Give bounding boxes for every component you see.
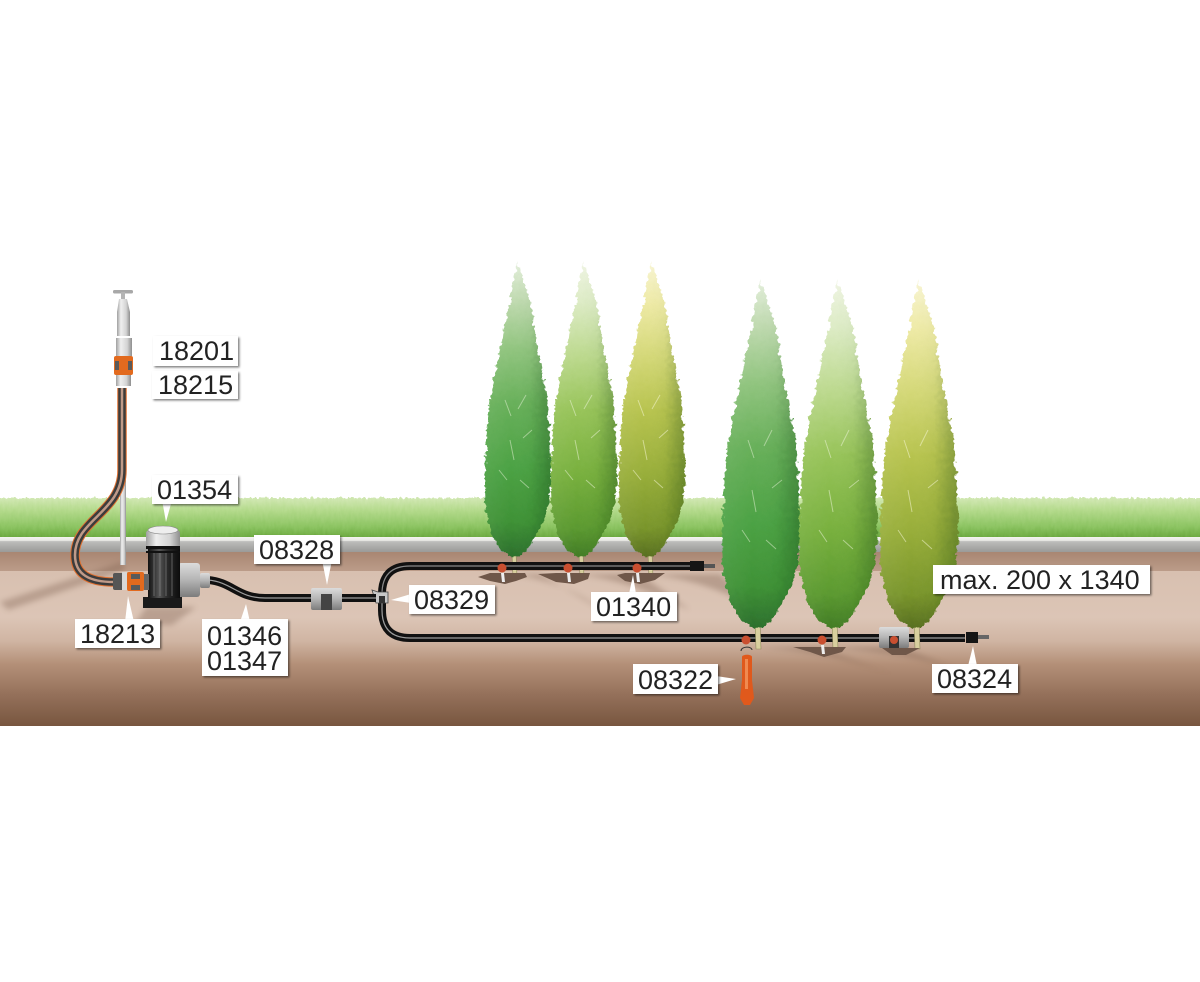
ground patches with drippers, upper row bbox=[478, 564, 665, 584]
main pipe bbox=[208, 580, 376, 598]
tree 4 bbox=[722, 280, 800, 649]
metal rod bbox=[120, 470, 126, 565]
soil bbox=[0, 552, 1200, 726]
tree 1 bbox=[485, 262, 551, 577]
label 01340 bbox=[591, 575, 677, 622]
tap and connectors bbox=[113, 290, 133, 386]
label 08322: 08322 bbox=[638, 665, 713, 695]
label 18215: 18215 bbox=[158, 370, 233, 400]
garden hose bbox=[75, 388, 122, 582]
row 1 trees bbox=[485, 262, 685, 577]
tree 5 bbox=[799, 280, 877, 649]
label 01354: 01354 bbox=[157, 475, 232, 505]
label 08324: 08324 bbox=[937, 664, 1012, 694]
orange hose connector 18213 bbox=[113, 572, 149, 591]
label 01340: 01340 bbox=[596, 592, 671, 622]
ground patches with drippers, lower row bbox=[742, 636, 920, 657]
tree 6 bbox=[880, 280, 958, 649]
orange tool 08322 bbox=[740, 647, 754, 705]
end plug, lower pipe bbox=[966, 632, 989, 643]
label 08329: 08329 bbox=[414, 585, 489, 615]
label 08324 bbox=[932, 646, 1018, 694]
T connector 08329 bbox=[372, 590, 388, 603]
label 18201: 18201 bbox=[159, 336, 234, 366]
filter unit 01354 bbox=[143, 526, 210, 608]
label 01346 / 01347: 01347 bbox=[207, 646, 282, 676]
row 2 trees bbox=[722, 280, 958, 649]
label max. 200 x 1340: max. 200 x 1340 bbox=[940, 565, 1140, 595]
tree 3 bbox=[619, 262, 685, 577]
tree 2 bbox=[551, 262, 617, 577]
end plug, upper pipe bbox=[690, 561, 715, 571]
label 08328 bbox=[254, 535, 340, 585]
grass strip bbox=[0, 498, 1200, 539]
label 01346 / 01347: 01346 bbox=[207, 621, 282, 651]
kerb bbox=[0, 537, 1200, 552]
label 01346 / 01347 bbox=[202, 604, 288, 676]
label 01354 bbox=[152, 475, 238, 522]
clip on lower pipe bbox=[879, 627, 909, 648]
label 18213: 18213 bbox=[80, 619, 155, 649]
upper and lower distribution pipes bbox=[382, 566, 965, 638]
label 08328: 08328 bbox=[259, 535, 334, 565]
clip 08328 bbox=[311, 588, 342, 610]
tree and object shadows on soil bbox=[0, 562, 960, 677]
label 18213 bbox=[75, 596, 160, 649]
